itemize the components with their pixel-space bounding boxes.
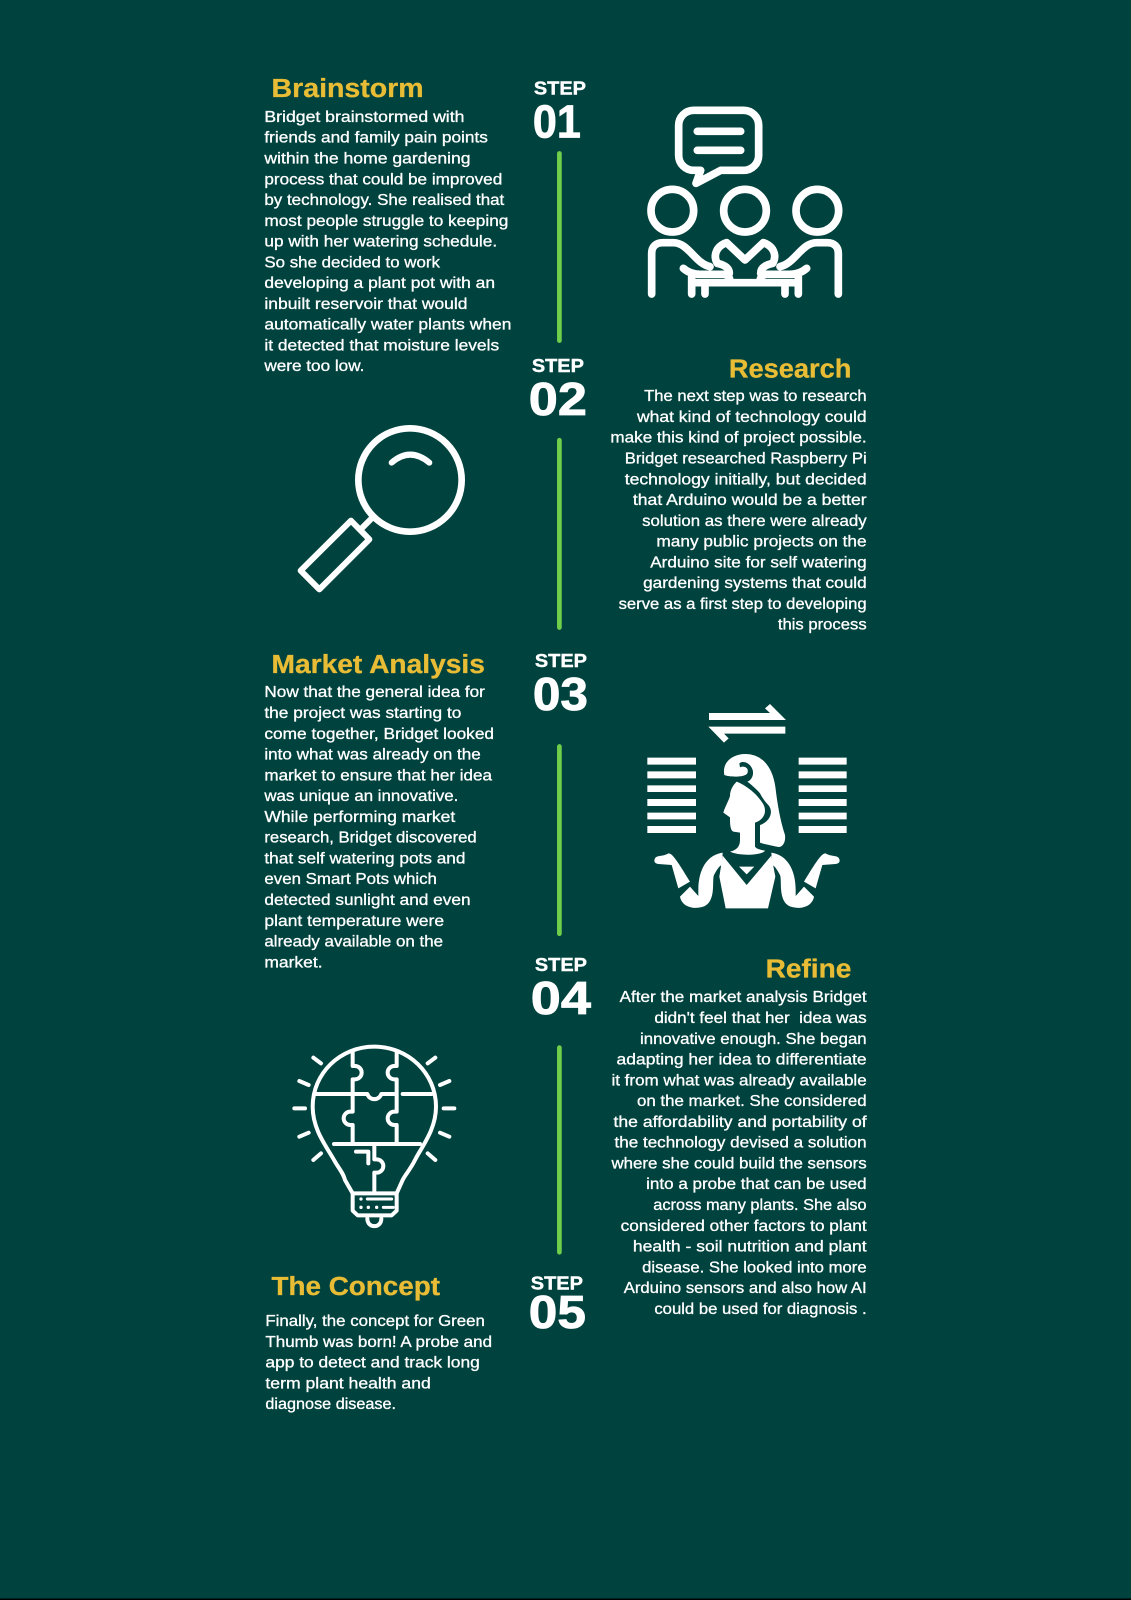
text block: market analysis description: already available on the	[264, 933, 443, 950]
step 03 label: 03	[533, 668, 588, 720]
text block: market analysis description: market.	[264, 954, 323, 971]
text block: brainstorm description: it detected that moisture levels	[264, 337, 499, 354]
panel: market analysis text	[263, 649, 494, 971]
text block: brainstorm description: process that could be improved	[264, 171, 502, 188]
text block: brainstorm description: developing a plant pot with an	[264, 275, 495, 292]
text block: brainstorm description: by technology. She realised that	[264, 192, 505, 209]
text block: brainstorm description: within the home gardening	[263, 150, 471, 167]
text block: market analysis description: that self watering pots and	[264, 850, 465, 867]
heading: Refine: Refine	[766, 954, 851, 984]
text block: research description: Arduino site for self watering	[650, 554, 867, 571]
text block: research description: serve as a first step to developing	[619, 596, 867, 613]
step 04 label	[531, 954, 592, 1024]
text block: market analysis description: Now that the general idea for	[264, 684, 485, 701]
icon: light bulb made of puzzle pieces	[294, 1047, 454, 1226]
step 04 label: 04	[531, 972, 592, 1024]
text block: research description: technology initially, but decided	[625, 471, 867, 488]
text block: brainstorm description: friends and family pain points	[264, 130, 488, 147]
text block: refine description: disease. She looked into more	[642, 1259, 867, 1276]
text block: refine description: After the market analysis Bridget	[620, 989, 867, 1006]
text block: refine description: the affordability and portability of	[614, 1114, 867, 1131]
text block: research description: solution as there were already	[642, 513, 867, 530]
text block: brainstorm description: up with her watering schedule.	[264, 234, 497, 251]
connector line 1	[557, 151, 562, 343]
text block: research description: what kind of technology could	[636, 409, 867, 426]
text block: concept description: Finally, the concept for Green	[265, 1313, 485, 1330]
text block: concept description: term plant health and	[265, 1375, 431, 1392]
text block: refine description: considered other factors to plant	[621, 1218, 867, 1235]
icon: woman weighing options	[647, 704, 847, 908]
exchange arrows	[708, 704, 786, 743]
step 01 label: 01	[533, 95, 581, 147]
woman figure	[654, 754, 840, 908]
timeline: step labels and connectors	[529, 78, 592, 1338]
text block: brainstorm description: Bridget brainstormed with	[264, 109, 464, 126]
text block: refine description: it from what was already available	[611, 1072, 867, 1089]
text block: refine description: into a probe that can be used	[646, 1176, 867, 1193]
step 04 label: STEP	[535, 954, 587, 975]
text block: research description: Bridget researched Raspberry Pi	[625, 451, 867, 468]
text block: refine description: health - soil nutrition and plant	[633, 1239, 867, 1256]
text block: research description: The next step was to research	[644, 388, 867, 405]
text block: refine description: Arduino sensors and also how AI	[624, 1280, 867, 1297]
text block: market analysis description: the project was starting to	[264, 705, 461, 722]
text block: concept description	[265, 1313, 492, 1413]
panel: research text	[610, 354, 867, 634]
left list bars	[647, 758, 696, 833]
step 05 label: STEP	[531, 1272, 583, 1293]
text block: market analysis description: even Smart Pots which	[264, 871, 437, 888]
text block: brainstorm description: inbuilt reservoir that would	[264, 296, 468, 313]
text block: market analysis description	[263, 684, 494, 971]
text block: brainstorm description: most people struggle to keeping	[264, 213, 508, 230]
right list bars	[799, 758, 847, 833]
step 03 label	[533, 650, 588, 720]
text block: market analysis description: While performing market	[264, 809, 456, 826]
text block: market analysis description: come together, Bridget looked	[264, 726, 494, 743]
heading: The Concept: The Concept	[272, 1271, 440, 1301]
text block: concept description: diagnose disease.	[265, 1396, 396, 1413]
text block: research description: gardening systems that could	[643, 575, 867, 592]
step 02 label: 02	[529, 373, 587, 425]
text block: brainstorm description: So she decided to work	[264, 254, 440, 271]
step 03 label: STEP	[535, 650, 587, 671]
text block: refine description: the technology devised a solution	[615, 1135, 867, 1152]
connector line 4	[557, 1045, 562, 1255]
text block: concept description: app to detect and track long	[265, 1355, 480, 1372]
text block: refine description: across many plants. She also	[653, 1197, 867, 1214]
text block: research description: make this kind of project possible.	[610, 430, 867, 447]
text block: market analysis description: was unique an innovative.	[263, 788, 458, 805]
text block: refine description: didn't feel that her idea was	[654, 1010, 867, 1027]
text block: brainstorm description: were too low.	[263, 358, 364, 375]
panel: brainstorm text	[263, 73, 511, 375]
text block: refine description: adapting her idea to differentiate	[617, 1052, 867, 1069]
text block: market analysis description: into what was already on the	[264, 747, 481, 764]
heading: Research: Research	[729, 354, 851, 384]
heading: Market Analysis: Market Analysis	[272, 649, 485, 679]
step 01 label: STEP	[534, 78, 586, 99]
text block: concept description: Thumb was born! A probe and	[265, 1334, 492, 1351]
heading: Brainstorm: Brainstorm	[272, 73, 424, 103]
step 02 label: STEP	[532, 355, 584, 376]
panel: the concept text	[265, 1271, 492, 1413]
text block: refine description: where she could build the sensors	[610, 1155, 867, 1172]
text block: research description	[610, 388, 867, 634]
connector line 2	[557, 438, 562, 630]
step 02 label	[529, 355, 587, 425]
panel: refine text	[610, 954, 867, 1318]
text block: market analysis description: detected sunlight and even	[264, 892, 471, 909]
icon: magnifying glass	[301, 428, 462, 589]
text block: brainstorm description	[263, 109, 511, 375]
icon: people meeting with speech bubble	[651, 110, 839, 294]
text block: refine description	[610, 989, 867, 1318]
text block: market analysis description: market to ensure that her idea	[264, 767, 492, 784]
text block: research description: that Arduino would be a better	[633, 492, 867, 509]
text block: brainstorm description: automatically water plants when	[264, 317, 511, 334]
text block: research description: many public projects on the	[656, 534, 867, 551]
text block: refine description: could be used for diagnosis .	[654, 1301, 867, 1318]
text block: market analysis description: research, Bridget discovered	[264, 830, 477, 847]
text block: research description: this process	[778, 617, 867, 634]
step 05 label: 05	[529, 1286, 586, 1338]
text block: market analysis description: plant temperature were	[264, 913, 444, 930]
connector line 3	[557, 744, 562, 936]
text block: refine description: innovative enough. She began	[640, 1031, 867, 1048]
text block: refine description: on the market. She considered	[637, 1093, 867, 1110]
